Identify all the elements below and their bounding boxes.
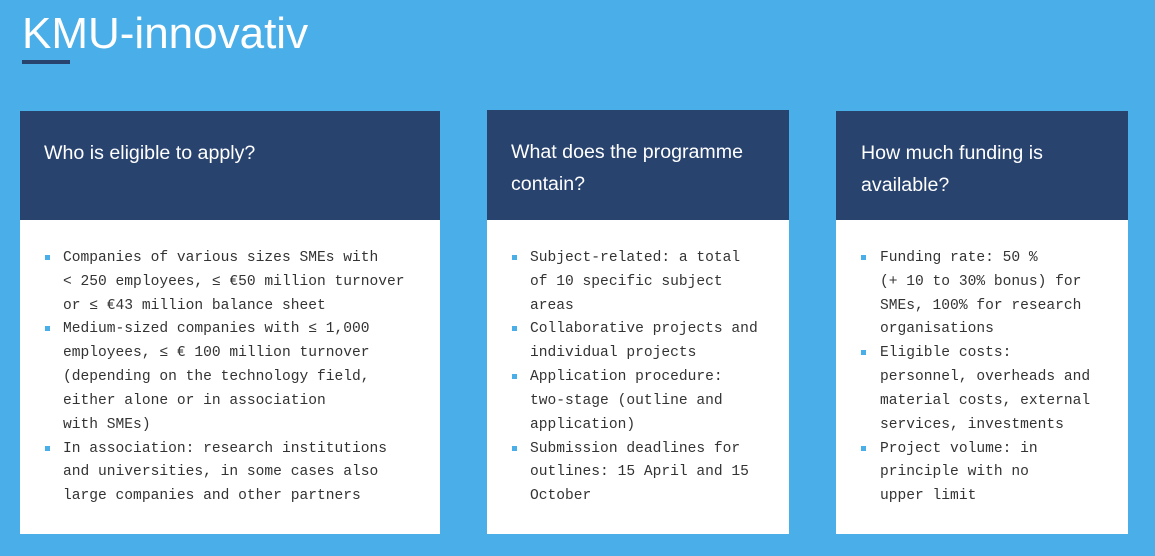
bullet list: funding: services, investments [880, 417, 1064, 433]
title underline [22, 60, 70, 64]
bullet list: eligibility: either alone or in association [63, 393, 326, 409]
bullet list: programme contents: Application procedure: [530, 369, 723, 385]
bullet list: programme contents: Subject-related: a total [530, 250, 740, 266]
bullet list: programme contents: October [530, 488, 591, 504]
panel: who is eligible [20, 111, 440, 534]
panel: funding [836, 111, 1128, 534]
bullet list: funding: (+ 10 to 30% bonus) for [880, 274, 1081, 290]
bullet list: programme contents: Submission deadlines for [530, 441, 740, 457]
panel: programme contents [487, 110, 789, 534]
bullet list: funding: personnel, overheads and [880, 369, 1090, 385]
bullet list: funding: principle with no [880, 464, 1029, 480]
panel header: funding [836, 111, 1128, 220]
bullet list: programme contents: outlines: 15 April and 15 [530, 464, 749, 480]
panel header: who is eligible [20, 111, 440, 220]
bullet list: eligibility: large companies and other partners [63, 488, 361, 504]
bullet list: eligibility: Medium-sized companies with ≤ 1,000 [63, 321, 370, 337]
bullet list: eligibility: employees, ≤ € 100 million turnover [63, 345, 370, 361]
bullet list: programme contents [512, 250, 758, 504]
bullet list: eligibility: with SMEs) [63, 417, 151, 433]
bullet list: funding: upper limit [880, 488, 976, 504]
bullet list: funding: SMEs, 100% for research [880, 298, 1081, 314]
bullet list: eligibility: (depending on the technology field, [63, 369, 370, 385]
panel header: programme contents [487, 110, 789, 220]
bullet list: programme contents: Collaborative projects and [530, 321, 758, 337]
bullet list: funding: Project volume: in [880, 441, 1038, 457]
bullet list: eligibility: < 250 employees, ≤ €50 million turnover [63, 274, 405, 290]
bullet list: eligibility [45, 250, 405, 504]
bullet list: eligibility: or ≤ €43 million balance sheet [63, 298, 326, 314]
bullet list: programme contents: areas [530, 298, 574, 314]
bullet list: funding: Eligible costs: [880, 345, 1011, 361]
bullet list: eligibility: Companies of various sizes SMEs with [63, 250, 378, 266]
heading: programme contents: What does the programme contain? [511, 141, 743, 195]
title: KMU-innovativ [22, 9, 308, 58]
bullet list: funding: organisations [880, 321, 994, 337]
bullet list: eligibility: and universities, in some cases also [63, 464, 378, 480]
heading: who is eligible: Who is eligible to apply? [44, 142, 255, 164]
bullet list: funding [861, 250, 1090, 504]
bullet list: programme contents: two-stage (outline and [530, 393, 723, 409]
bullet list: programme contents: individual projects [530, 345, 696, 361]
bullet list: funding: Funding rate: 50 % [880, 250, 1038, 266]
heading: funding: How much funding is available? [861, 142, 1043, 196]
bullet list: eligibility: In association: research institutions [63, 441, 387, 457]
bullet list: programme contents: of 10 specific subject [530, 274, 723, 290]
bullet list: programme contents: application) [530, 417, 635, 433]
bullet list: funding: material costs, external [880, 393, 1090, 409]
